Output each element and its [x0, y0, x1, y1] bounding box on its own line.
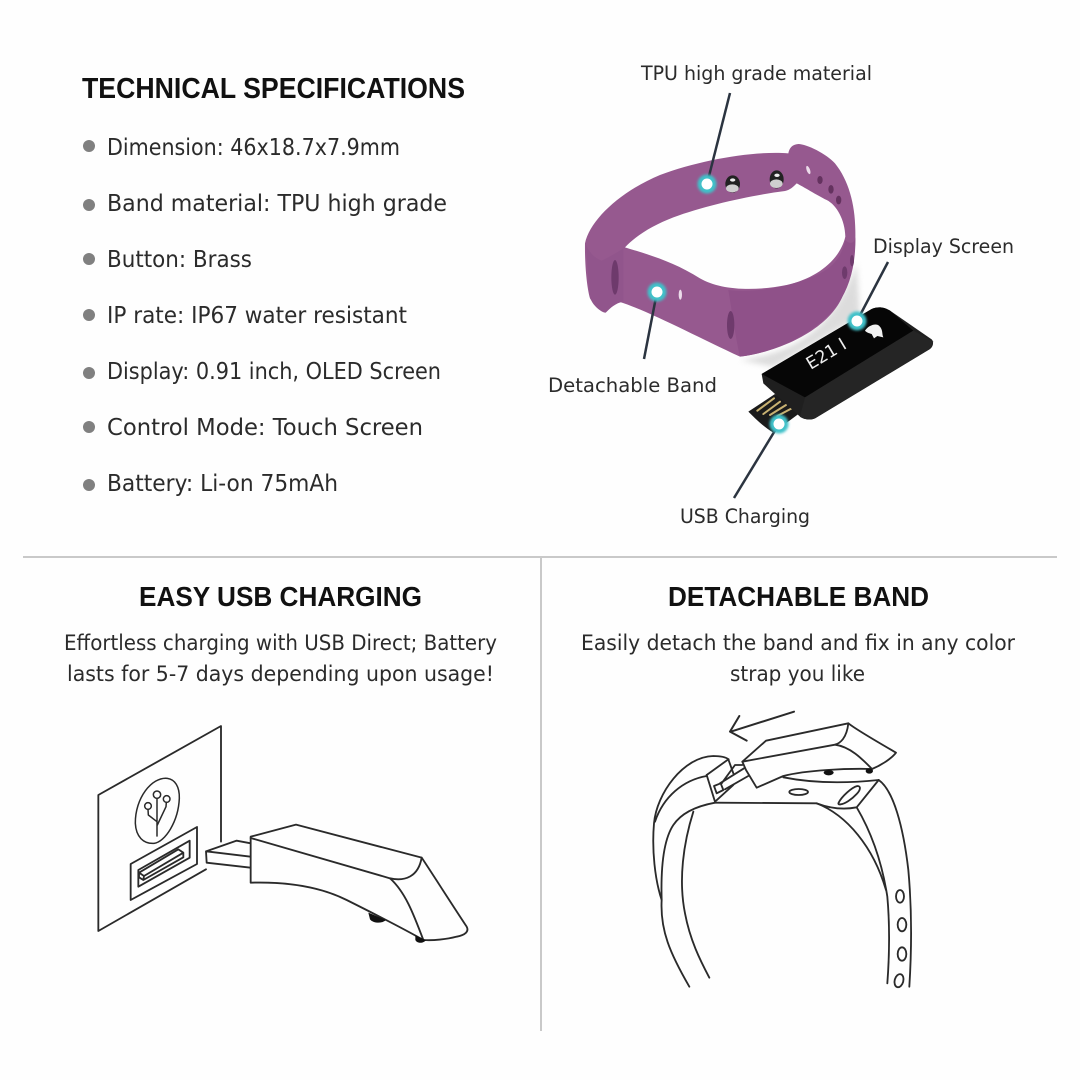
- illustration: USB port charging: [98, 726, 467, 943]
- label: Display Screen: Display Screen: [873, 235, 1014, 258]
- leader line: TPU material: [707, 93, 730, 184]
- purple wristband: [585, 144, 860, 367]
- wall panel: [98, 726, 221, 931]
- brass button: [725, 175, 740, 193]
- marker: USB charging: [770, 414, 788, 434]
- spec: dimension: Dimension: 46x18.7x7.9mm: [107, 135, 400, 161]
- spec: battery: Battery: Li-on 75mAh: [107, 471, 338, 497]
- USB symbol: [135, 778, 179, 843]
- brass button: [770, 170, 784, 188]
- marker: detachable band: [648, 282, 666, 302]
- title: technical specifications: TECHNICAL SPECIFICATIONS: [82, 73, 465, 105]
- text: detachable band description: [581, 631, 1015, 686]
- text: USB charging description: Effortless charging with USB Direct; Battery: [64, 631, 497, 655]
- label: USB Charging: USB Charging: [680, 505, 810, 528]
- text: detachable band description: Easily detach the band and fix in any color: [581, 631, 1015, 655]
- screen readout: E21 I: [803, 335, 850, 374]
- spec: display: Display: 0.91 inch, OLED Screen: [107, 359, 441, 385]
- USB port: [131, 827, 197, 900]
- leader line: USB charging: [734, 424, 779, 498]
- module studs: [824, 768, 873, 775]
- tracker module plug: [206, 841, 251, 868]
- arrow: [730, 712, 794, 741]
- heading: detachable band: DETACHABLE BAND: [668, 581, 929, 612]
- leader line: display screen: [857, 262, 888, 321]
- label: Detachable Band: Detachable Band: [548, 374, 717, 397]
- device: tracker module with USB: [748, 307, 933, 433]
- USB connector: [748, 394, 802, 433]
- band end: [251, 825, 467, 940]
- spec: control mode: Control Mode: Touch Screen: [107, 415, 423, 441]
- band studs: [368, 913, 426, 943]
- marker: TPU material: [698, 174, 716, 194]
- tracker module: [742, 723, 896, 788]
- heading: easy USB charging: EASY USB CHARGING: [139, 581, 422, 612]
- label: TPU high grade material: TPU high grade material: [640, 62, 872, 85]
- illustration: detaching band: [653, 712, 911, 988]
- screen logo: [865, 324, 883, 338]
- text: USB charging description: [64, 631, 497, 686]
- text: USB charging description: lasts for 5-7 days depending upon usage!: [67, 662, 494, 686]
- spec: IP rate: IP rate: IP67 water resistant: [107, 303, 407, 329]
- leader line: detachable band: [644, 292, 657, 359]
- spec: band material: Band material: TPU high grade: [107, 191, 447, 217]
- band top segment: [715, 777, 911, 988]
- spec: button: Button: Brass: [107, 247, 252, 273]
- marker: display screen: [848, 312, 866, 330]
- specification list: [83, 135, 447, 497]
- text: detachable band description: strap you like: [730, 662, 865, 686]
- left band: [653, 756, 750, 987]
